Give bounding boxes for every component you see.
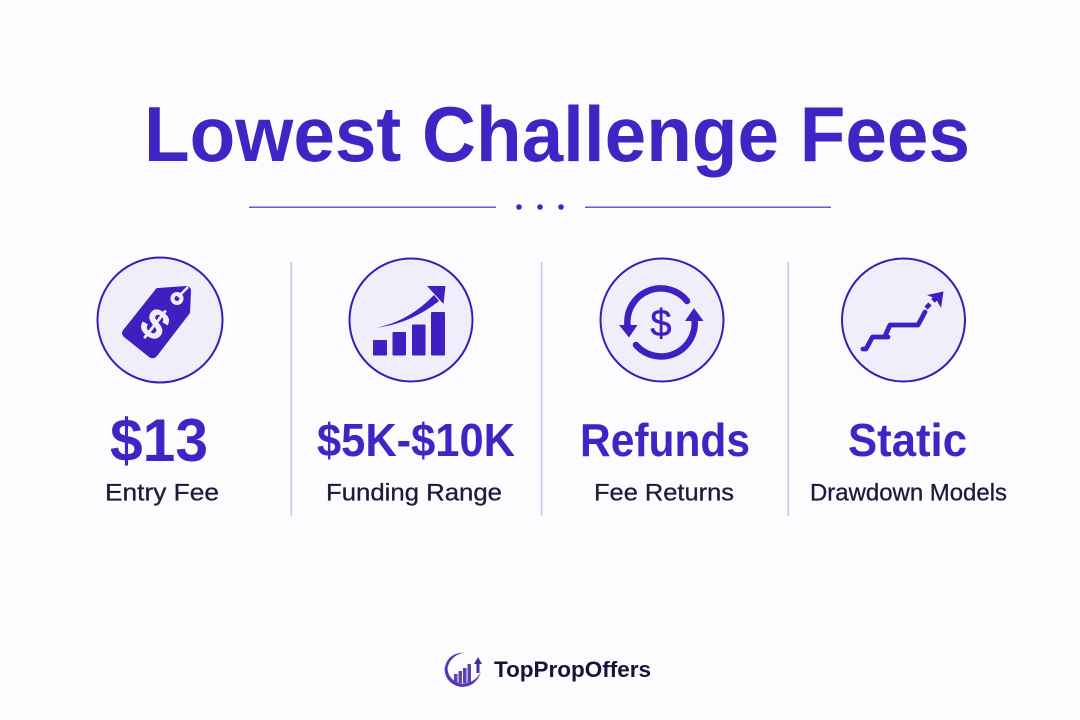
icon: price tag: $ [132,298,179,350]
icon: price tag [98,258,222,382]
value: $13: $13 [110,407,208,474]
logo wordmark: TopPropOffers [494,657,651,682]
value: $5K-$10K: $5K-$10K [317,414,515,466]
label: funding range: Funding Range [326,480,502,506]
title: Lowest Challenge Fees [144,90,970,178]
footer logo [444,652,651,687]
icon: bar chart with arrow [350,258,472,382]
panel: static drawdown [810,258,1007,506]
label: drawdown models: Drawdown Models [810,480,1007,506]
panel: entry fee [98,258,222,506]
icon: circular refund arrows [600,258,724,382]
label: fee returns: Fee Returns [594,480,734,506]
icon: rising stepped line [842,258,965,382]
title divider with dots [249,204,831,210]
value: refunds: Refunds [580,414,750,466]
panel: refunds [580,258,750,506]
icon: logo mark [444,652,482,687]
label: entry fee: Entry Fee [105,480,219,506]
panel: funding range [317,258,515,506]
icon: circular refund arrows: $ [650,303,672,345]
value: static: Static [848,414,967,466]
